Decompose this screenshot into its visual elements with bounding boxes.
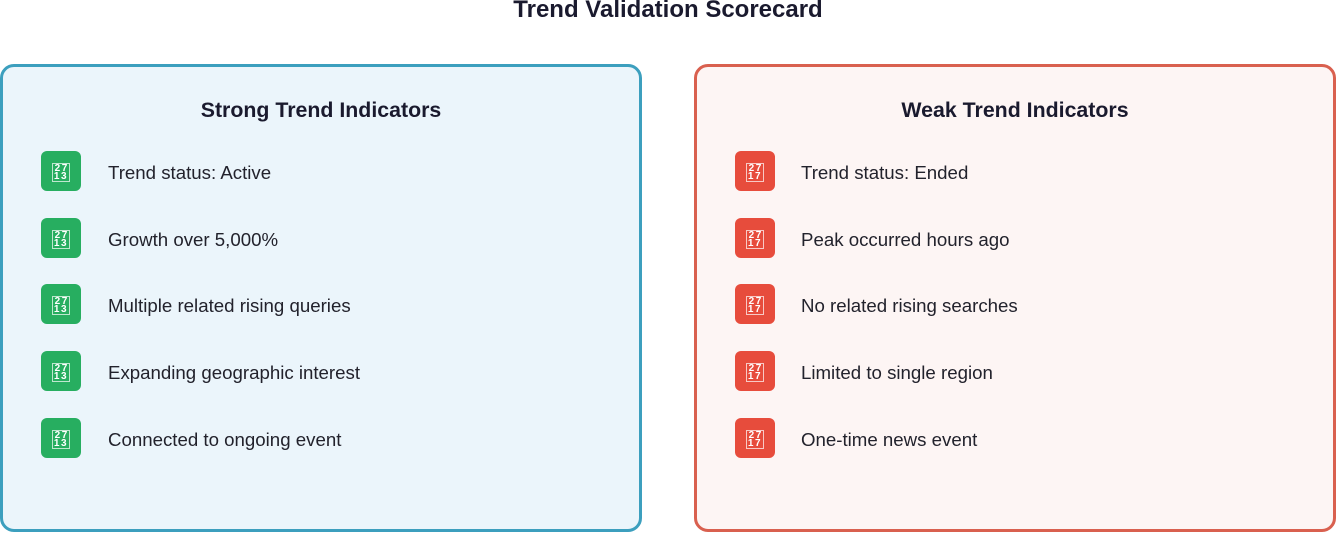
icon: green check 4: 27 (55, 362, 69, 374)
icon: green check 5: 27 (55, 430, 69, 440)
icon: red cross 5: 27 (749, 430, 763, 440)
icon: green check 2 (41, 218, 81, 258)
icon: red cross 4: 17 (748, 371, 762, 382)
icon: red cross 3: 17 (748, 304, 762, 315)
panel: weak trend indicators (694, 64, 1336, 532)
icon: green check 1: 27 (55, 162, 69, 174)
icon: red cross 5: 17 (748, 438, 762, 449)
heading: strong trend indicators: Strong Trend Indicators (201, 98, 441, 122)
icon: red cross 2: 17 (748, 238, 762, 249)
icon: red cross 3: 27 (749, 296, 763, 306)
text: no related searches: No related rising searches (801, 295, 1018, 316)
icon: green check 2: 27 (55, 230, 69, 240)
icon: red cross 1 (735, 151, 775, 191)
icon: green check 5 (41, 418, 81, 458)
panel: strong trend indicators (0, 64, 642, 532)
text: trend status ended: Trend status: Ended (801, 162, 968, 183)
icon: red cross 1: 27 (749, 162, 763, 174)
icon: green check 1: 13 (54, 171, 68, 182)
text: ongoing event: Connected to ongoing event (108, 429, 341, 450)
text: trend status active: Trend status: Active (108, 162, 271, 183)
icon: red cross 4 (735, 351, 775, 391)
icon: red cross 2 (735, 218, 775, 258)
text: related queries: Multiple related rising queries (108, 295, 351, 316)
icon: red cross 2: 27 (749, 230, 763, 240)
icon: red cross 4: 27 (749, 362, 763, 374)
text: one-time news: One-time news event (801, 429, 977, 450)
icon: green check 1 (41, 151, 81, 191)
icon: green check 2: 13 (54, 238, 68, 249)
icon: green check 4 (41, 351, 81, 391)
text: peak: Peak occurred hours ago (801, 229, 1009, 250)
icon: green check 5: 13 (54, 438, 68, 449)
icon: red cross 1: 17 (748, 171, 762, 182)
icon: green check 3: 27 (55, 296, 69, 306)
heading: weak trend indicators: Weak Trend Indicators (901, 98, 1129, 122)
text: geographic interest: Expanding geographic interest (108, 362, 360, 383)
text: growth: Growth over 5,000% (108, 229, 278, 250)
icon: green check 3 (41, 284, 81, 324)
icon: green check 4: 13 (54, 371, 68, 382)
icon: red cross 3 (735, 284, 775, 324)
icon: green check 3: 13 (54, 304, 68, 315)
icon: red cross 5 (735, 418, 775, 458)
text: single region: Limited to single region (801, 362, 993, 383)
